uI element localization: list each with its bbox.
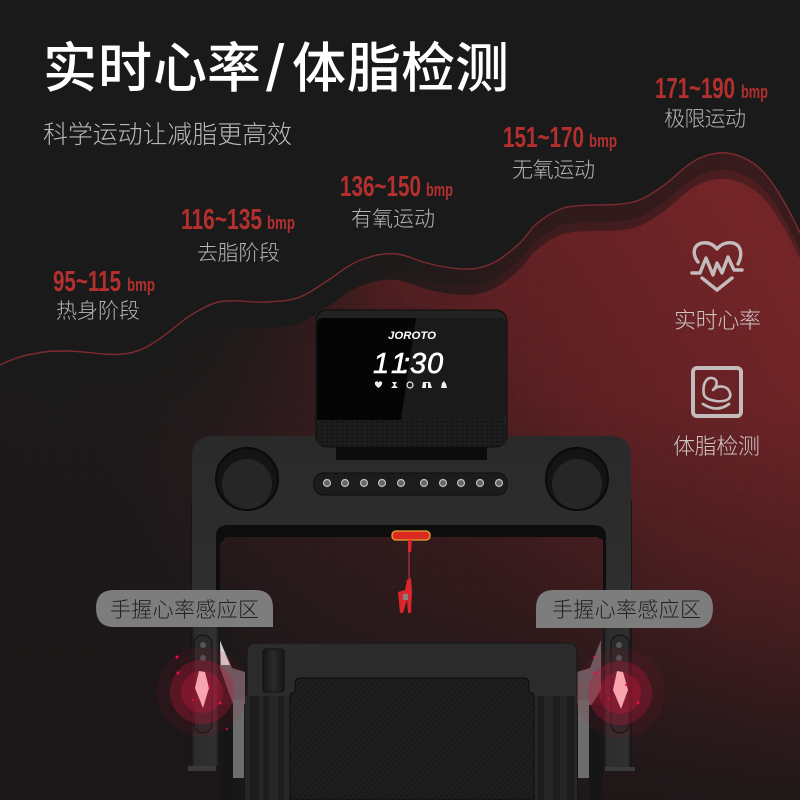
- zone label: aerobic: bmp: [426, 180, 453, 200]
- grip sensor slot right: [611, 635, 629, 733]
- title: 实时心率: [43, 24, 261, 103]
- subtitle: 科学运动让减脂更高效: [43, 121, 292, 149]
- clock display: 11:30: [373, 348, 443, 380]
- zone label: aerobic: [340, 171, 453, 231]
- cup holder left: [216, 448, 278, 510]
- safety key: [392, 531, 430, 613]
- zone label: anaerobic: 无氧运动: [512, 159, 595, 182]
- console stand: [336, 445, 487, 460]
- label: body fat detection: 体脂检测: [673, 434, 760, 459]
- zone label: warm-up: [53, 266, 155, 323]
- rail feet: [188, 766, 635, 771]
- grip buttons: [200, 642, 622, 661]
- side frame wedge: [220, 640, 245, 704]
- cup holder right: [546, 448, 608, 510]
- pulse glow right: [575, 648, 665, 738]
- zone label: fat burn: [181, 204, 295, 265]
- zone label: extreme: 171~190: [655, 73, 735, 105]
- zone label: fat burn: bmp: [267, 213, 295, 233]
- side rail left: [191, 500, 220, 766]
- brand logo: JOROTO: [388, 330, 436, 342]
- side rail right: [603, 500, 632, 768]
- grip sensor slot left: [194, 635, 212, 733]
- console screen housing: [316, 310, 507, 447]
- console frame: [192, 436, 631, 600]
- zone label: aerobic: 136~150: [340, 171, 421, 203]
- zone label: extreme: 极限运动: [664, 108, 746, 131]
- side frame strip left: [233, 700, 244, 778]
- icon: heart with pulse: [692, 243, 742, 290]
- deck knob: [263, 649, 284, 692]
- button bar: [314, 473, 507, 495]
- dark column left: [219, 705, 233, 800]
- zone label: anaerobic: 151~170: [503, 122, 584, 154]
- display icons: [375, 381, 447, 388]
- dark column right: [589, 705, 603, 800]
- zone label: warm-up: 热身阶段: [56, 300, 140, 323]
- zone label: extreme: bmp: [741, 82, 768, 102]
- label: real-time heart rate: 实时心率: [674, 308, 761, 333]
- callout: grip sensor right: [536, 590, 713, 628]
- zone label: extreme: [655, 73, 768, 131]
- zone label: fat burn: 116~135: [181, 204, 262, 236]
- zone label: anaerobic: bmp: [589, 131, 617, 151]
- callout: grip sensor left: 手握心率感应区: [110, 599, 259, 622]
- zone label: warm-up: 95~115: [53, 266, 121, 298]
- zone label: warm-up: bmp: [127, 275, 155, 295]
- deck: [245, 643, 577, 800]
- pulse glow left: [157, 647, 247, 737]
- treadmill: [157, 310, 665, 800]
- icon: body fat muscle: [693, 368, 741, 416]
- zone label: fat burn: 去脂阶段: [197, 242, 280, 265]
- under-console shadow band: [216, 525, 606, 600]
- side frame strip right: [578, 700, 589, 778]
- callout: grip sensor left: [96, 590, 273, 627]
- zone label: aerobic: 有氧运动: [351, 208, 435, 231]
- side frame wedge right: [577, 640, 601, 707]
- callout: grip sensor right: 手握心率感应区: [552, 599, 701, 622]
- title: /: [266, 31, 285, 105]
- zone label: anaerobic: [503, 122, 617, 182]
- title: 体脂检测: [292, 24, 509, 103]
- running belt: [290, 678, 534, 800]
